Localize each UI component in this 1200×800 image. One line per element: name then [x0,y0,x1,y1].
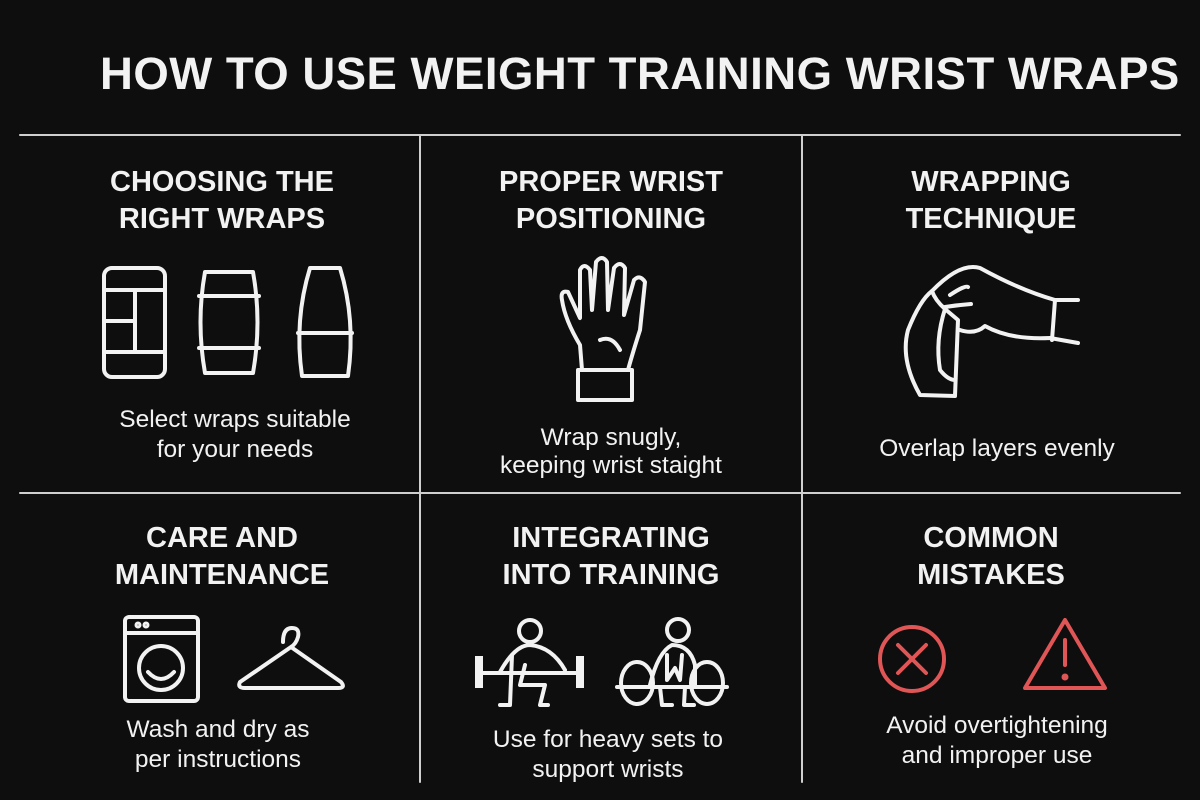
panel: choosing [110,166,351,463]
heading [499,166,723,235]
text: and improper use [902,742,1092,769]
heading [917,522,1065,591]
text [886,712,1108,769]
panel: integrating [493,522,723,783]
text [500,424,722,479]
text: keeping wrist staight [500,452,722,479]
text: Use for heavy sets to [493,726,723,753]
text: per instructions [135,746,301,773]
text: Select wraps suitable [119,406,351,433]
icon: warning triangle [1025,620,1105,688]
heading [906,166,1076,235]
heading: INTEGRATING [512,522,710,554]
heading: COMMON [923,522,1059,554]
icon: lifter squat [475,620,584,705]
text [126,716,309,773]
heading: INTO TRAINING [503,559,719,591]
heading: POSITIONING [516,203,706,235]
text [119,406,351,463]
heading: CARE AND [146,522,298,554]
icon: washer [125,617,198,701]
heading: PROPER WRIST [499,166,723,198]
text: Wash and dry as [127,716,309,743]
heading [503,522,719,591]
text: Overlap layers evenly [879,435,1115,462]
heading: MISTAKES [917,559,1065,591]
text: for your needs [157,436,313,463]
text [493,726,723,783]
icon: hand [562,258,645,400]
heading [115,522,329,591]
panel: mistakes [886,522,1108,769]
heading: TECHNIQUE [906,203,1076,235]
panel: care [115,522,329,773]
heading: CHOOSING THE [110,166,334,198]
icon: wrapping technique [906,267,1078,396]
heading [110,166,334,235]
text: Wrap snugly, [541,424,681,451]
heading: RIGHT WRAPS [119,203,325,235]
panel: positioning [499,166,723,479]
text: support wrists [532,756,684,783]
heading: WRAPPING [911,166,1071,198]
icon: error circle [880,627,944,691]
icon: hanger [239,628,343,688]
icon: wraps [104,268,352,377]
panel: technique [879,166,1115,462]
title: HOW TO USE WEIGHT TRAINING WRIST WRAPS [100,48,1180,99]
heading: MAINTENANCE [115,559,329,591]
text: Avoid overtightening [886,712,1108,739]
icon: lifter deadlift [617,619,727,705]
